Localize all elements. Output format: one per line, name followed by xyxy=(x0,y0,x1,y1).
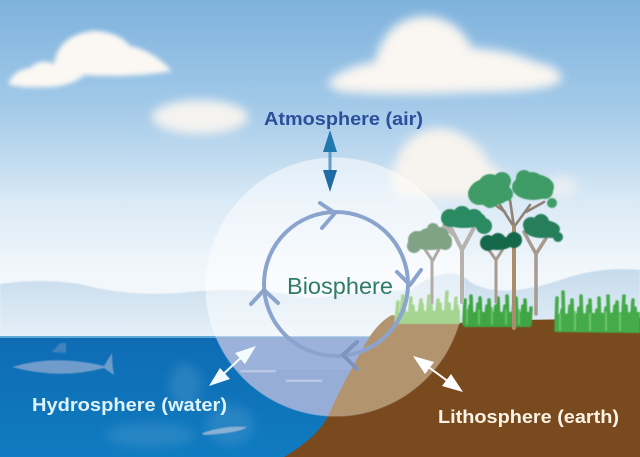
grass base bands xyxy=(396,310,460,324)
canopy: pale tree xyxy=(407,223,452,253)
cycle arrowhead: top xyxy=(320,203,335,228)
cycle arrowhead: bottom xyxy=(343,342,357,369)
fish: large xyxy=(12,343,114,375)
cycle arrowhead: right xyxy=(397,270,421,285)
arrow: hydrosphere exchange xyxy=(209,346,256,386)
label: Biosphere: Biosphere xyxy=(287,273,393,299)
grass outside circle right xyxy=(556,292,636,330)
cycle ring with arrows xyxy=(251,203,421,369)
sky background xyxy=(0,0,640,340)
cycle arrowhead: left xyxy=(251,290,278,304)
label: Lithosphere: Lithosphere (earth) xyxy=(438,406,619,427)
canopy: main tree xyxy=(468,170,557,208)
grass xyxy=(396,292,640,333)
water xyxy=(0,336,640,457)
tree canopies xyxy=(407,170,563,253)
label: Hydrosphere: Hydrosphere (water) xyxy=(32,394,227,415)
trees xyxy=(407,170,563,328)
tree trunks xyxy=(420,200,550,328)
canopy: small dark tree xyxy=(480,232,522,251)
grass outside circle left xyxy=(464,296,531,324)
distant mountains xyxy=(0,269,640,340)
fish: small xyxy=(202,427,247,435)
canopy: dark tree xyxy=(441,206,492,234)
arrow: atmosphere exchange xyxy=(323,130,337,192)
label: Atmosphere: Atmosphere (air) xyxy=(264,108,423,129)
grass inside circle xyxy=(396,292,458,322)
land: brown earth xyxy=(284,315,640,457)
clouds xyxy=(8,16,578,198)
bubbles xyxy=(105,363,254,447)
translucent biosphere circle xyxy=(206,158,464,416)
arrow: lithosphere exchange xyxy=(413,356,463,392)
water and land seen through the circle xyxy=(216,315,458,416)
canopy: right tree xyxy=(523,214,563,242)
